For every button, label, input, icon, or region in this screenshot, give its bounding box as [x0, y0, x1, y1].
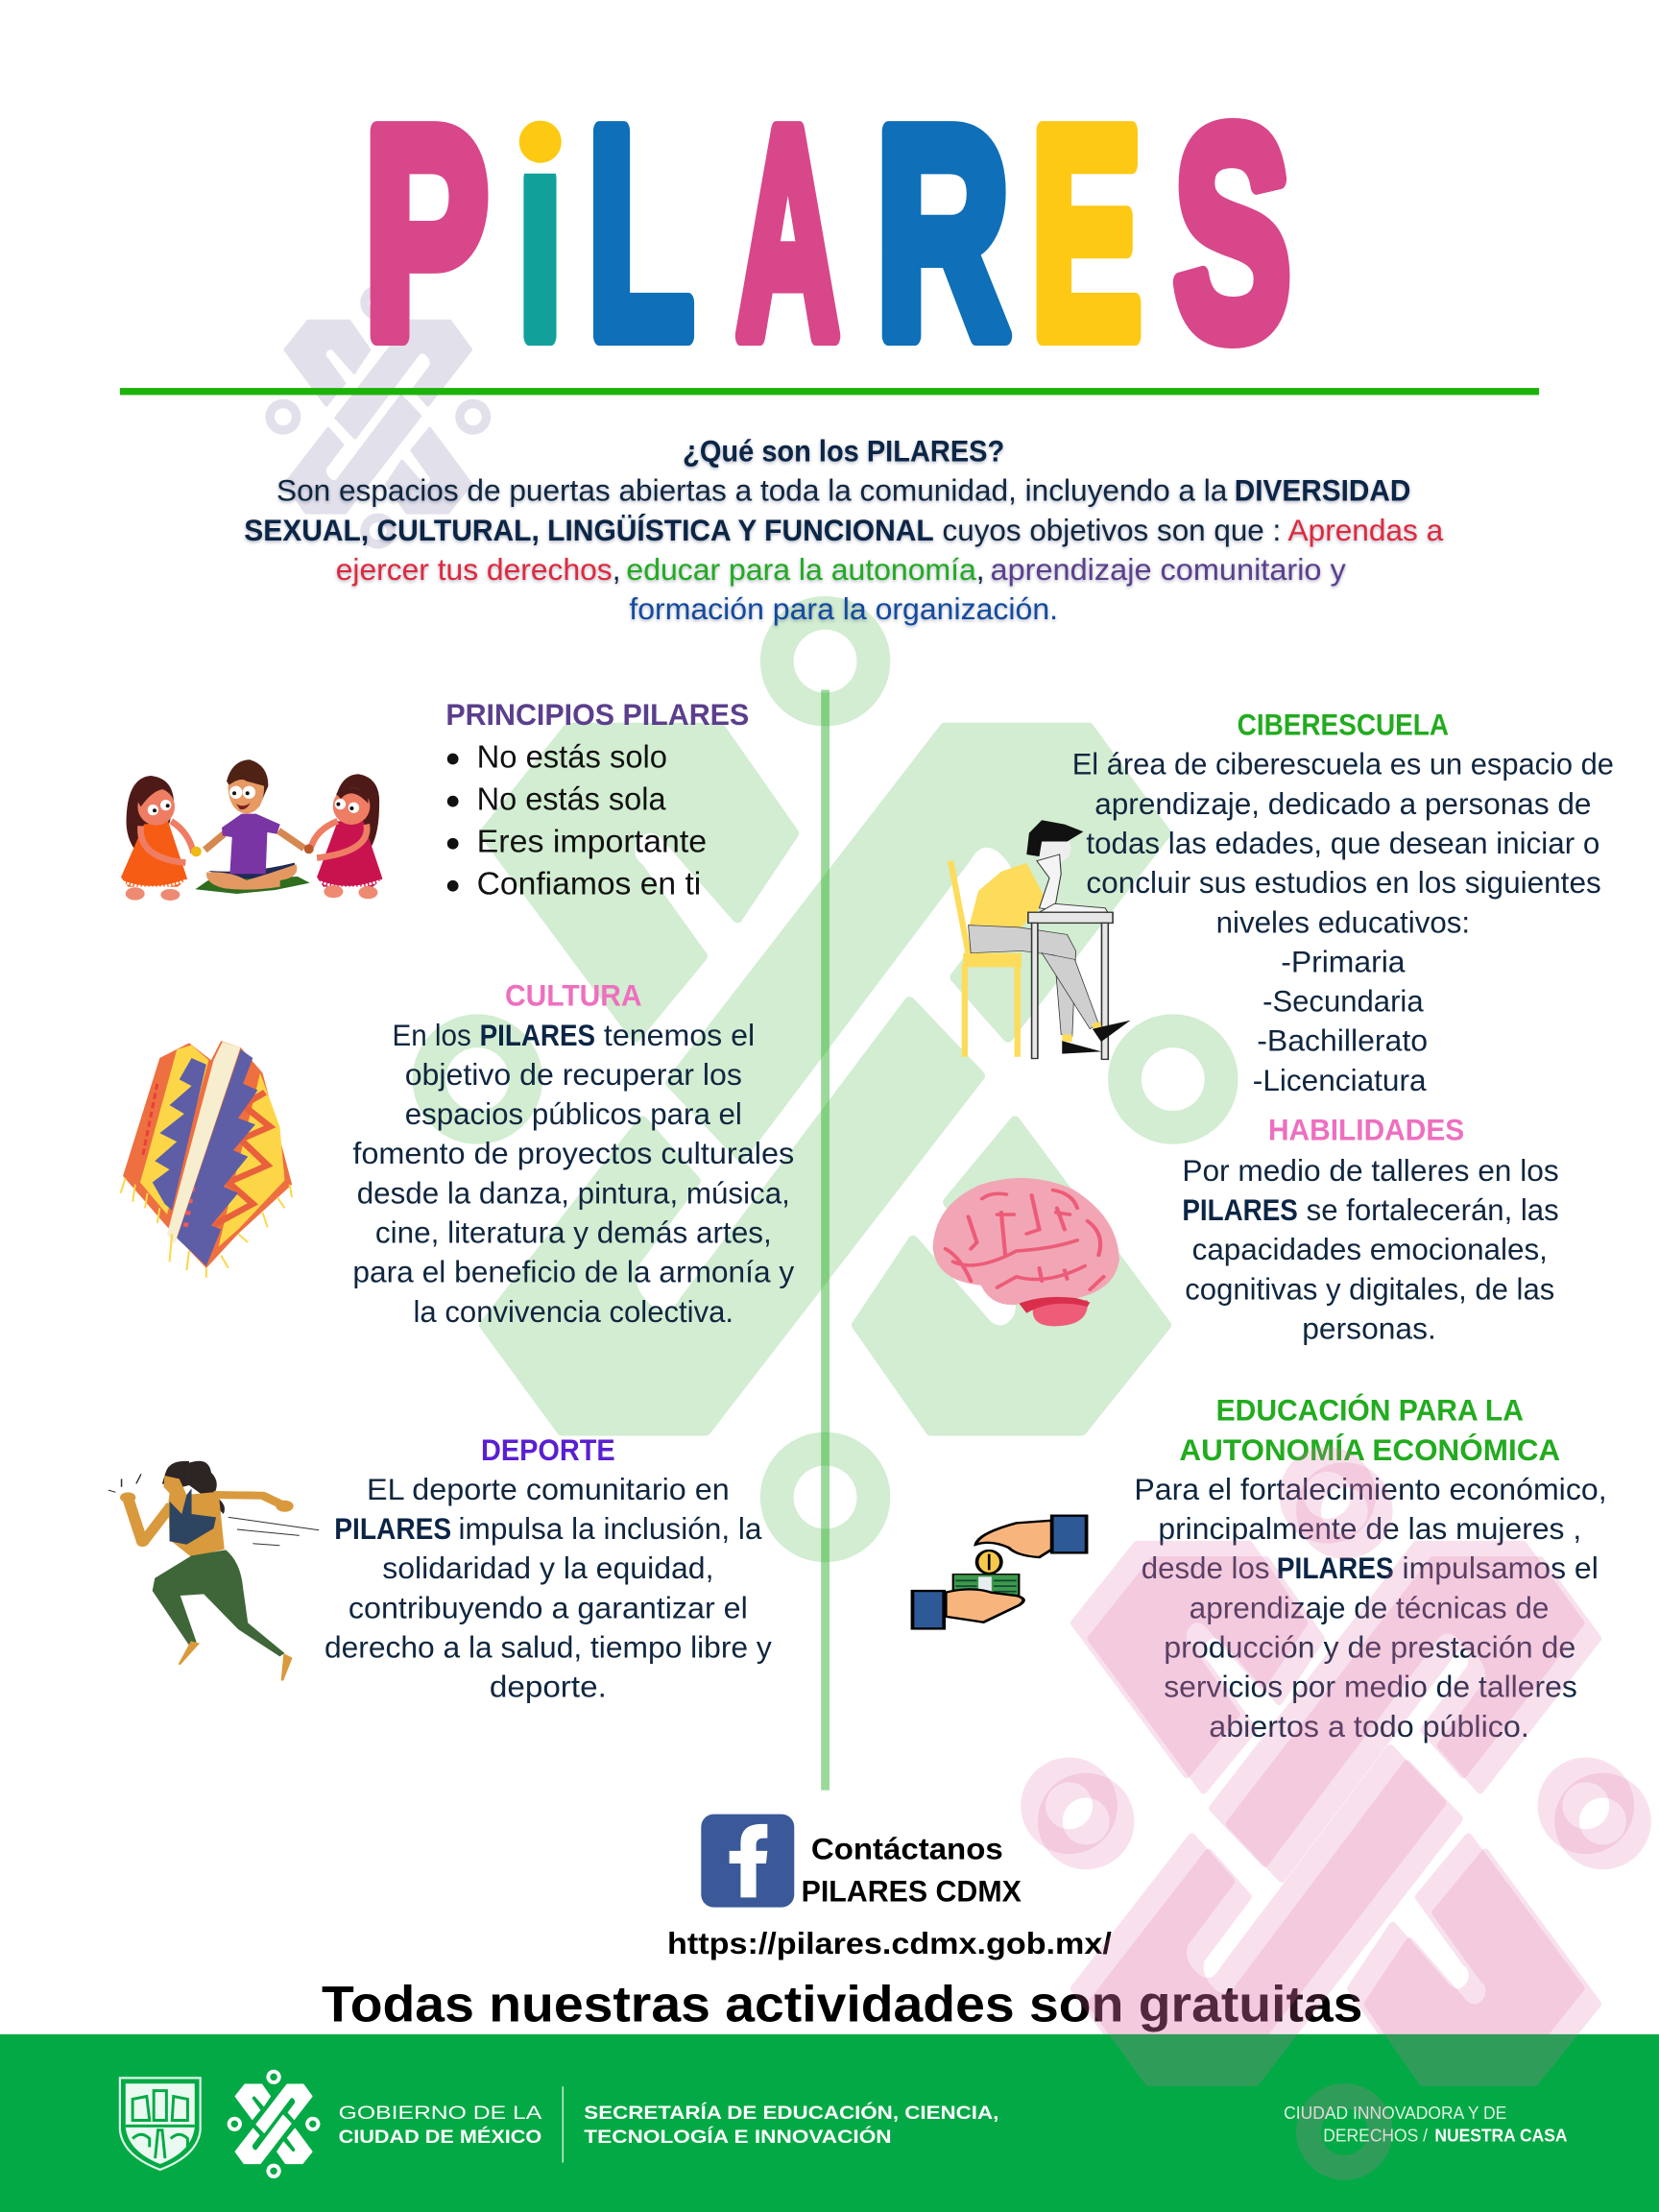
text: educación económica: abiertos a todo público.: [1209, 1709, 1529, 1743]
icon: brain: [933, 1178, 1119, 1326]
contact: facebook block: [701, 1815, 1022, 1909]
intro text block: [244, 433, 1444, 626]
icon: hands exchanging money: [912, 1516, 1087, 1628]
text: deporte: impulsa la inclusión, la: [459, 1511, 762, 1546]
intro text block: ,: [613, 552, 620, 587]
intro text block: aprendizaje comunitario y: [991, 552, 1346, 587]
intro text block: ejercer tus derechos: [336, 552, 613, 587]
heading: educación económica: [1179, 1393, 1560, 1467]
text: ciberescuela: niveles educativos:: [1216, 904, 1470, 939]
callout: free activities: Todas nuestras actividades son gratuitas: [322, 1977, 1362, 2033]
text: habilidades: personas.: [1302, 1310, 1436, 1345]
text: ciberescuela: -Secundaria: [1262, 984, 1424, 1019]
panel: principios pilares: [445, 697, 749, 902]
icon: runner: [108, 1461, 319, 1680]
intro text block: DIVERSIDAD: [1235, 473, 1410, 508]
text: habilidades: cognitivas y digitales, de las: [1185, 1271, 1554, 1306]
heading: deporte: DEPORTE: [481, 1432, 615, 1467]
bullet list: Eres importante: [477, 825, 707, 860]
text: deporte: deporte.: [490, 1670, 607, 1704]
text: educación económica: desde los: [1142, 1551, 1269, 1585]
text: ciberescuela: concluir sus estudios en los siguientes: [1086, 865, 1601, 900]
background emblem: pink second layer: [1042, 1466, 1647, 2176]
title: PILARES logo: [371, 117, 1290, 349]
text: educación económica: impulsamos el: [1403, 1551, 1599, 1585]
title: PILARES logo: P: [364, 66, 489, 399]
text: deporte: PILARES: [334, 1511, 451, 1546]
text: ciberescuela: -Bachillerato: [1257, 1023, 1428, 1058]
footer: slogan: NUESTRA CASA: [1434, 2126, 1567, 2146]
footer: ministry name: TECNOLOGÍA E INNOVACIÓN: [584, 2125, 892, 2148]
background emblem: green: [418, 601, 1233, 1557]
intro text block: ¿Qué son los PILARES?: [683, 433, 1004, 468]
text: educación económica: [1134, 1472, 1607, 1743]
text: ciberescuela: aprendizaje, dedicado a personas de: [1094, 786, 1591, 821]
text: educación económica: servicios por medio de talleres: [1164, 1670, 1577, 1704]
footer band: [0, 2034, 1659, 2212]
text: educación económica: aprendizaje de técnicas de: [1190, 1590, 1549, 1624]
text: habilidades: Por medio de talleres en los: [1182, 1153, 1559, 1188]
text: habilidades: capacidades emocionales,: [1192, 1232, 1548, 1266]
text: cultura: la convivencia colectiva.: [414, 1294, 733, 1329]
icon: facebook: [701, 1815, 794, 1908]
title: PILARES logo: i: [517, 66, 563, 399]
text: ciberescuela: -Primaria: [1281, 944, 1406, 978]
text: cultura: fomento de proyectos culturales: [352, 1136, 794, 1170]
website url: https://pilares.cdmx.gob.mx/: [667, 1926, 1112, 1960]
text: cultura: [352, 1018, 794, 1329]
contact text: [802, 1832, 1022, 1909]
footer: government name: GOBIERNO DE LA: [339, 2103, 542, 2124]
heading: educación económica: AUTONOMÍA ECONÓMICA: [1179, 1432, 1560, 1467]
background emblem: grey: [267, 286, 490, 547]
intro text block: educar para la autonomía: [626, 552, 976, 587]
text: ciberescuela: El área de ciberescuela es un espacio de: [1072, 747, 1614, 781]
intro text block: ,: [976, 552, 985, 587]
title: PILARES logo: L: [588, 66, 694, 399]
intro text block: formación para la organización.: [629, 591, 1058, 626]
panel: deporte: [325, 1432, 772, 1704]
panel: cultura: [352, 978, 794, 1329]
text: deporte: contribuyendo a garantizar el: [349, 1590, 748, 1624]
icon: coat of arms: [120, 2078, 201, 2170]
text: deporte: [325, 1472, 772, 1704]
text: educación económica: Para el fortalecimiento económico,: [1134, 1472, 1607, 1506]
heading: educación económica: EDUCACIÓN PARA LA: [1216, 1393, 1524, 1428]
heading: habilidades: HABILIDADES: [1268, 1112, 1464, 1146]
text: educación económica: producción y de prestación de: [1164, 1630, 1575, 1665]
text: cultura: desde la danza, pintura, música,: [357, 1175, 790, 1210]
footer: ministry name: [584, 2101, 998, 2148]
intro text block: Son espacios de puertas abiertas a toda la comunidad, incluyendo a la: [276, 473, 1228, 508]
icon: city emblem: [228, 2070, 320, 2177]
panel: educación para la autonomía económica: [1134, 1393, 1607, 1743]
text: ciberescuela: todas las edades, que desean iniciar o: [1086, 826, 1599, 860]
title: PILARES logo: S: [1174, 66, 1290, 399]
text: deporte: EL deporte comunitario en: [367, 1472, 730, 1506]
text: deporte: solidaridad y la equidad,: [382, 1551, 714, 1585]
title: PILARES logo: R: [876, 66, 1010, 399]
text: educación económica: principalmente de las mujeres ,: [1158, 1511, 1581, 1546]
text: ciberescuela: [1072, 747, 1614, 1097]
text: deporte: derecho a la salud, tiempo libre y: [325, 1630, 772, 1665]
contact text: PILARES CDMX: [802, 1874, 1022, 1909]
text: cultura: tenemos el: [604, 1018, 755, 1052]
text: educación económica: PILARES: [1277, 1551, 1394, 1585]
footer: slogan: DERECHOS /: [1323, 2126, 1429, 2146]
icon: student at desk: [950, 820, 1131, 1059]
footer: government name: [339, 2103, 542, 2148]
contact text: Contáctanos: [811, 1832, 1003, 1866]
text: ciberescuela: -Licenciatura: [1253, 1063, 1427, 1097]
footer logos and text: [120, 2070, 1567, 2177]
footer: government name: CIUDAD DE MÉXICO: [339, 2126, 541, 2148]
icon: poncho: [121, 1041, 292, 1278]
text: habilidades: PILARES: [1182, 1192, 1298, 1227]
text: habilidades: se fortalecerán, las: [1307, 1192, 1559, 1227]
heading: cultura: CULTURA: [505, 978, 642, 1013]
text: habilidades: [1182, 1153, 1559, 1345]
footer: slogan: [1284, 2103, 1567, 2146]
bullet list: No estás sola: [477, 781, 666, 817]
panel: habilidades: [1182, 1112, 1559, 1345]
title: PILARES logo: A: [736, 66, 839, 399]
bullet list: Confiamos en ti: [477, 867, 701, 902]
text: cultura: PILARES: [480, 1018, 595, 1052]
footer: ministry name: SECRETARÍA DE EDUCACIÓN, CIENCIA,: [584, 2101, 998, 2124]
heading: ciberescuela: CIBERESCUELA: [1238, 708, 1449, 742]
intro text block: Aprendas a: [1288, 513, 1444, 547]
intro text block: cuyos objetivos son que :: [943, 513, 1281, 547]
background emblem: pink first layer: [1024, 1451, 1630, 2161]
heading: principios: PRINCIPIOS PILARES: [445, 697, 749, 732]
intro text block: SEXUAL, CULTURAL, LINGÜÍSTICA Y FUNCIONAL: [244, 513, 934, 547]
bullet list: No estás solo: [477, 739, 667, 775]
bullet list: [447, 739, 707, 902]
panel: ciberescuela: [1072, 708, 1614, 1097]
footer: slogan: CIUDAD INNOVADORA Y DE: [1284, 2103, 1506, 2123]
text: cultura: espacios públicos para el: [405, 1096, 742, 1131]
text: cultura: En los: [392, 1018, 471, 1052]
text: cultura: objetivo de recuperar los: [405, 1057, 742, 1092]
icon: children holding hands: [121, 759, 382, 901]
central vertical line: [821, 690, 830, 1791]
text: cultura: para el beneficio de la armonía y: [352, 1255, 794, 1289]
text: cultura: cine, literatura y demás artes,: [375, 1215, 772, 1250]
title: PILARES logo: E: [1031, 66, 1142, 399]
